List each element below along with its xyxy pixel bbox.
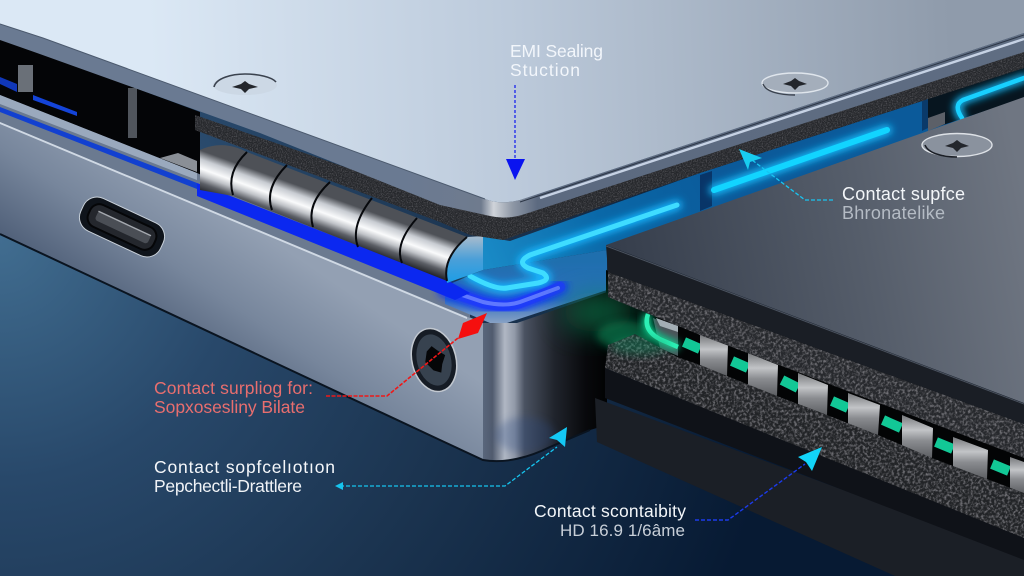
foam gasket — [195, 50, 1024, 240]
illuminated cavity — [445, 66, 1024, 323]
lower foam strip — [605, 334, 1024, 538]
callout: red contact — [154, 313, 487, 417]
callout: EMI sealing structure: EMI Sealing — [510, 41, 603, 61]
callout: contact surface: Bhronatelike — [842, 203, 945, 223]
upper foam strip — [608, 272, 1024, 458]
callout: contact surface — [739, 149, 965, 223]
lower right plate — [562, 97, 1024, 576]
chassis body — [0, 95, 607, 461]
cavity back wall — [483, 68, 1024, 270]
cavity floor — [445, 250, 607, 323]
callout: contact surface: Contact supfce — [842, 184, 965, 204]
callout: cyan contact: Pepchectli-Drattlere — [154, 476, 302, 496]
port slot — [75, 192, 169, 262]
callout: red contact: Sopxosesliny Bilate — [154, 397, 305, 417]
top metal plate — [0, 0, 1024, 240]
callout: EMI sealing structure — [506, 41, 603, 180]
layer above block — [605, 368, 1024, 560]
roller end cap — [446, 236, 483, 283]
black recess — [606, 270, 1024, 510]
callout: contact scontaibity: Contact scontaibity — [534, 501, 686, 521]
callout: red contact: Contact surpliog for: — [154, 378, 313, 398]
roller contact springs — [197, 145, 483, 300]
callout: cyan contact: Contact sopfcelıotıon — [154, 457, 335, 477]
callout: cyan contact — [154, 427, 567, 496]
green channel segments — [684, 342, 1009, 471]
lower block — [595, 398, 1024, 576]
screw — [213, 74, 277, 95]
callout: contact scontaibity: HD 16.9 1/6âme — [560, 521, 685, 540]
metal ledge — [0, 95, 470, 318]
callout: contact scontaibity — [534, 447, 822, 540]
recess behind the chassis — [0, 38, 200, 176]
green glow — [562, 292, 634, 332]
metal clips — [700, 335, 1024, 494]
green light arc — [597, 314, 678, 356]
screw — [922, 134, 992, 157]
screw — [762, 73, 828, 95]
callout: EMI sealing structure: Stuction — [510, 60, 580, 80]
dark rim — [606, 245, 1024, 424]
plate surface — [606, 97, 1024, 403]
front screw — [405, 324, 463, 396]
neon seal lines — [445, 78, 1024, 306]
